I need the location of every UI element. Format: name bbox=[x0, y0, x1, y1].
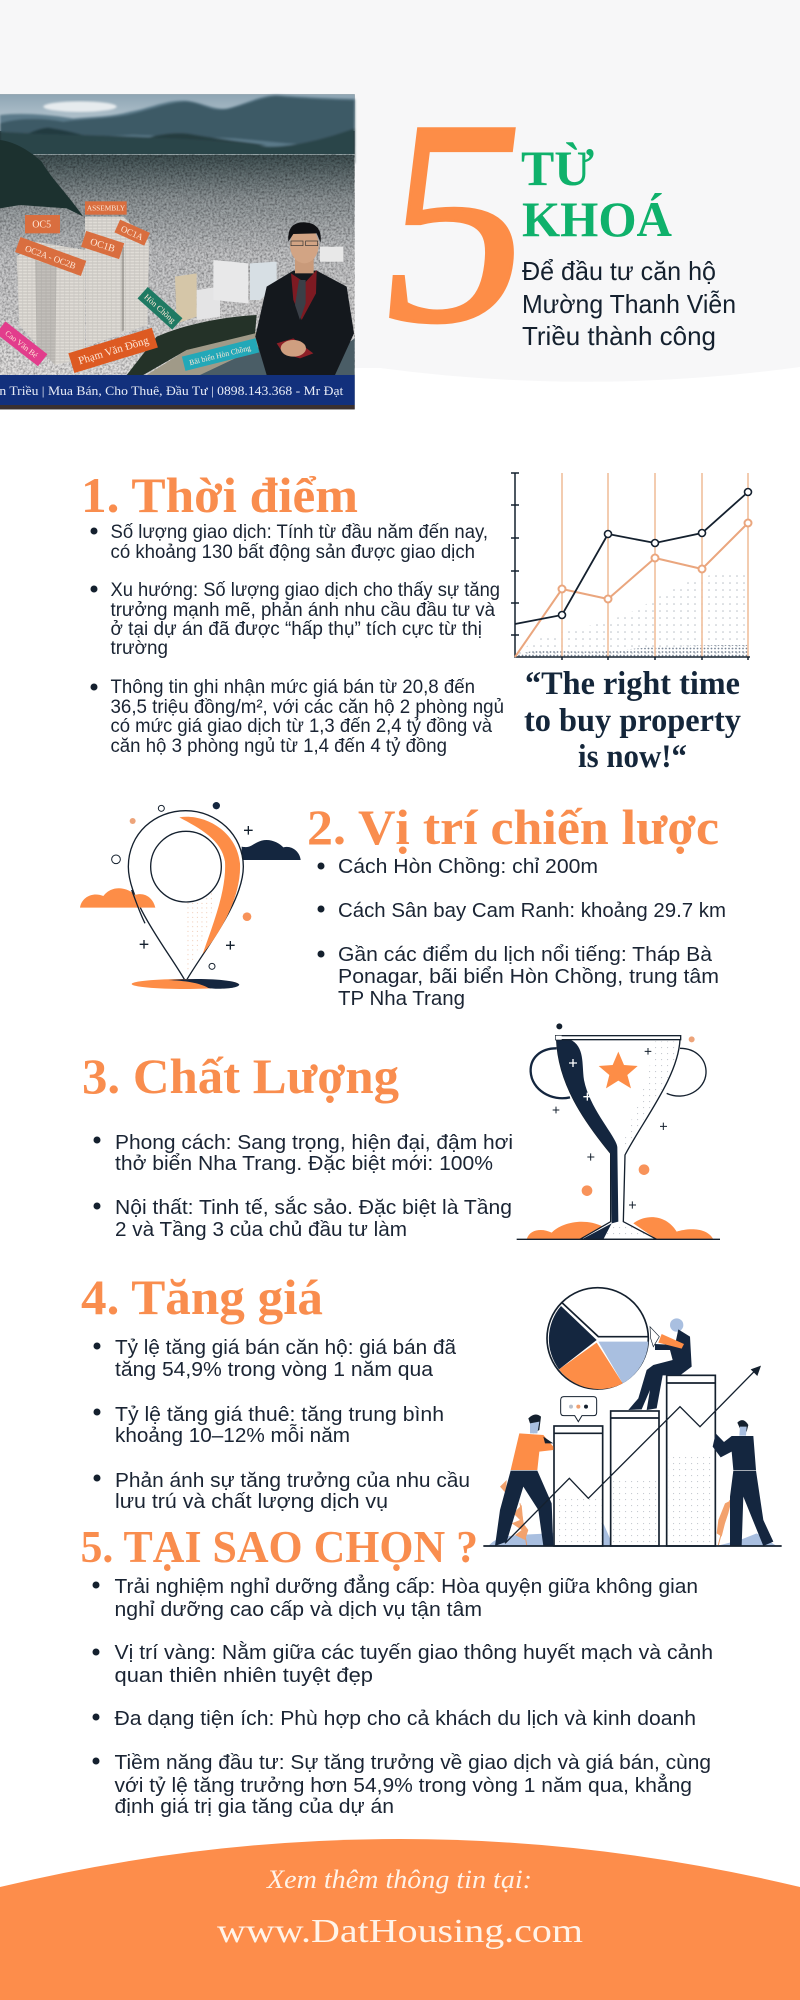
left worker bbox=[495, 1415, 553, 1546]
beach and sea bbox=[147, 332, 263, 375]
section 3 bullets: 2 và Tầng 3 của chủ đầu tư làm bbox=[115, 1219, 407, 1241]
photo caption band: n Triều | Mua Bán, Cho Thuê, Đầu Tư | 0898.143.368 - Mr Đạt bbox=[0, 384, 344, 398]
section 1 bullets: trưởng mạnh mẽ, phản ánh nhu cầu đầu tư và bbox=[110, 600, 495, 621]
map tags: Phạm Văn Đồng bbox=[77, 334, 151, 367]
section 1 bullets: Số lượng giao dịch: Tính từ đầu năm đến nay, bbox=[110, 522, 488, 543]
title: TỪ KHOÁ: KHOÁ bbox=[522, 191, 672, 247]
heading 1: 1. Thời điểm bbox=[81, 467, 358, 523]
speech bubble bbox=[561, 1397, 597, 1422]
section 4 bullets: Tỷ lệ tăng giá thuê: tăng trung bình bbox=[115, 1404, 444, 1426]
section 3 bullets: Phong cách: Sang trọng, hiện đại, đậm hơi bbox=[115, 1132, 513, 1154]
illustration: people building growth chart bbox=[483, 1288, 782, 1546]
subtitle: Triều thành công bbox=[522, 321, 716, 351]
quote: “The right time bbox=[525, 666, 740, 702]
quote: is now!“ bbox=[578, 739, 687, 775]
section 5 bullets: định giá trị gia tăng của dự án bbox=[114, 1796, 394, 1818]
map tags: OC1B bbox=[89, 237, 117, 255]
map tags: Cao Văn Bé bbox=[3, 329, 40, 360]
plants bbox=[520, 1500, 730, 1545]
heading 2: 2. Vị trí chiến lược bbox=[307, 799, 719, 855]
section 1 bullets: Thông tin ghi nhận mức giá bán từ 20,8 đến bbox=[110, 677, 475, 698]
pie chart bbox=[547, 1288, 649, 1389]
header background bbox=[0, 0, 800, 382]
photo: aerial view of the project with agent bbox=[0, 94, 355, 409]
heading 3: 3. Chất Lượng bbox=[82, 1048, 399, 1104]
section 1 bullets: có khoảng 130 bất động sản được giao dịch bbox=[110, 542, 475, 563]
section 2 bullets: TP Nha Trang bbox=[338, 988, 465, 1010]
title: TỪ KHOÁ bbox=[521, 140, 672, 247]
line chart bbox=[511, 473, 752, 660]
section 2 bullets: Ponagar, bãi biển Hòn Chồng, trung tâm bbox=[338, 966, 719, 988]
section 3 bullets: thở biển Nha Trang. Đặc biệt mới: 100% bbox=[115, 1153, 493, 1175]
agent figure bbox=[255, 222, 354, 375]
icon: location pin bbox=[80, 802, 301, 989]
title: big number five: 5 bbox=[364, 61, 548, 384]
section 1 bullets: ở tại dự án đã được “hấp thụ” tích cực từ thị bbox=[110, 619, 482, 640]
section 4 bullets: Tỷ lệ tăng giá bán căn hộ: giá bán đã bbox=[115, 1337, 457, 1359]
map tags: OC2A - OC2B bbox=[24, 243, 77, 271]
footer prompt: Xem thêm thông tin tại: bbox=[266, 1865, 532, 1894]
section 5 bullets: với tỷ lệ tăng trưởng hơn 54,9% trong vòng 1 năm qua, khẳng bbox=[114, 1773, 692, 1797]
map tags bbox=[0, 201, 259, 373]
subtitle: Mường Thanh Viễn bbox=[522, 289, 736, 319]
section 5 bullets: quan thiên nhiên tuyệt đẹp bbox=[114, 1665, 373, 1687]
bars bbox=[554, 1375, 715, 1546]
heading 4: 4. Tăng giá bbox=[81, 1269, 323, 1325]
section 5 bullets: nghỉ dưỡng cao cấp và dịch vụ tận tâm bbox=[114, 1599, 482, 1621]
section 2 bullets bbox=[318, 856, 726, 1010]
subtitle: Để đầu tư căn hộ bbox=[522, 256, 716, 286]
section 1 bullets: trường bbox=[110, 638, 168, 659]
section 2 bullets: Cách Hòn Chồng: chỉ 200m bbox=[338, 856, 598, 878]
icon: trophy bbox=[517, 1023, 720, 1239]
section 4 bullets: lưu trú và chất lượng dịch vụ bbox=[115, 1491, 388, 1513]
growth arrow bbox=[505, 1366, 761, 1543]
section 1 bullets: 36,5 triệu đồng/m², với các căn hộ 2 phòng ngủ bbox=[110, 697, 504, 718]
section 4 bullets: tăng 54,9% trong vòng 1 năm qua bbox=[115, 1359, 434, 1381]
section 2 bullets: Gần các điểm du lịch nổi tiếng: Tháp Bà bbox=[338, 944, 713, 966]
subtitle bbox=[522, 256, 736, 351]
section 3 bullets: Nội thất: Tinh tế, sắc sảo. Đặc biệt là Tầng bbox=[115, 1196, 512, 1219]
photo caption band bbox=[0, 375, 355, 405]
section 4 bullets: Phản ánh sự tăng trưởng của nhu cầu bbox=[115, 1470, 470, 1492]
section 1 bullets: có mức giá giao dịch từ 1,3 đến 2,4 tỷ đồng và bbox=[110, 716, 492, 737]
section 5 bullets: Đa dạng tiện ích: Phù hợp cho cả khách du lịch và kinh doanh bbox=[114, 1708, 696, 1730]
tower blocks bbox=[17, 217, 343, 365]
footer website: www.DatHousing.com bbox=[217, 1913, 583, 1950]
section 1 bullets: Xu hướng: Số lượng giao dịch cho thấy sự tăng bbox=[110, 580, 500, 601]
section 1 bullets: căn hộ 3 phòng ngủ từ 1,4 đến 4 tỷ đồng bbox=[110, 736, 447, 757]
map tags: ASSEMBLY bbox=[87, 204, 126, 213]
title: TỪ KHOÁ: TỪ bbox=[521, 140, 594, 196]
seated worker bbox=[628, 1318, 692, 1410]
quote bbox=[524, 666, 741, 775]
section 5 bullets: Trải nghiệm nghỉ dưỡng đẳng cấp: Hòa quyện giữa không gian bbox=[114, 1574, 698, 1598]
right worker bbox=[713, 1420, 773, 1546]
map tags: OC1A bbox=[119, 224, 145, 242]
heading 5: 5. TẠI SAO CHỌN ? bbox=[80, 1521, 478, 1572]
map tags: Bãi biển Hòn Chồng bbox=[188, 343, 252, 367]
section 5 bullets bbox=[92, 1574, 713, 1818]
quote: to buy property bbox=[524, 703, 741, 739]
section 2 bullets: Cách Sân bay Cam Ranh: khoảng 29.7 km bbox=[338, 900, 726, 922]
section 5 bullets: Vị trí vàng: Nằm giữa các tuyến giao thông huyết mạch và cảnh bbox=[114, 1641, 713, 1664]
section 1 bullets bbox=[90, 522, 504, 757]
section 4 bullets bbox=[94, 1337, 470, 1513]
section 3 bullets bbox=[94, 1132, 513, 1241]
footer band bbox=[0, 1839, 800, 2000]
map tags: OC5 bbox=[32, 220, 51, 231]
section 5 bullets: Tiềm năng đầu tư: Sự tăng trưởng về giao dịch và giá bán, cùng bbox=[114, 1752, 711, 1774]
section 4 bullets: khoảng 10–12% mỗi năm bbox=[115, 1424, 350, 1447]
map tags: Hòn Chồng bbox=[142, 292, 177, 325]
